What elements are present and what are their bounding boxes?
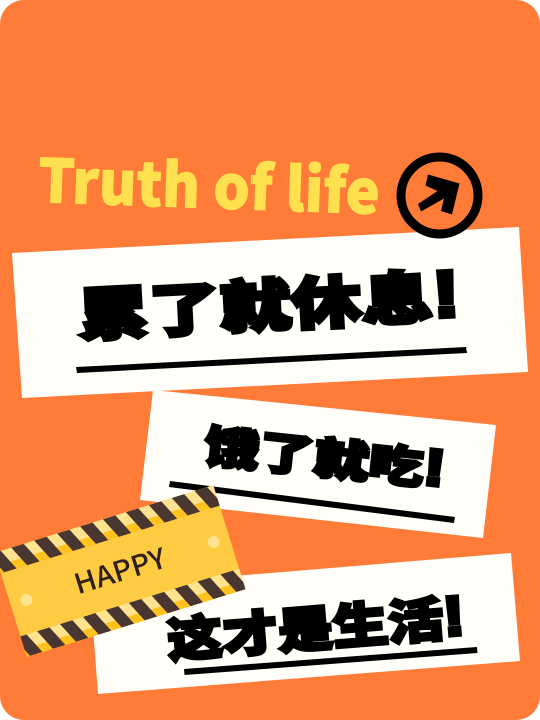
ticket body	[0, 485, 245, 657]
heading: eat when hungry: 饿了就吃 !	[202, 416, 448, 498]
heading: rest when tired: 累了就休息 !	[76, 256, 462, 350]
panel: this is life	[90, 553, 520, 694]
underline	[184, 647, 478, 675]
title: Truth of life: Truth of life	[37, 133, 382, 232]
panel background	[12, 227, 528, 398]
rivet right	[206, 535, 221, 550]
heading: this is life: 这才是生活 !	[165, 583, 467, 670]
top hazard band	[0, 484, 223, 575]
rivet left	[19, 592, 34, 607]
panel background	[90, 553, 520, 694]
icon: arrow in circle	[401, 157, 478, 234]
bottom hazard band	[14, 568, 249, 659]
panel: eat	[140, 390, 496, 538]
underline	[76, 347, 467, 373]
ticket: HAPPY	[0, 484, 249, 659]
label: HAPPY: HAPPY	[69, 537, 171, 603]
panel: rest	[12, 227, 528, 398]
panel background	[140, 390, 496, 538]
underline	[169, 481, 455, 523]
